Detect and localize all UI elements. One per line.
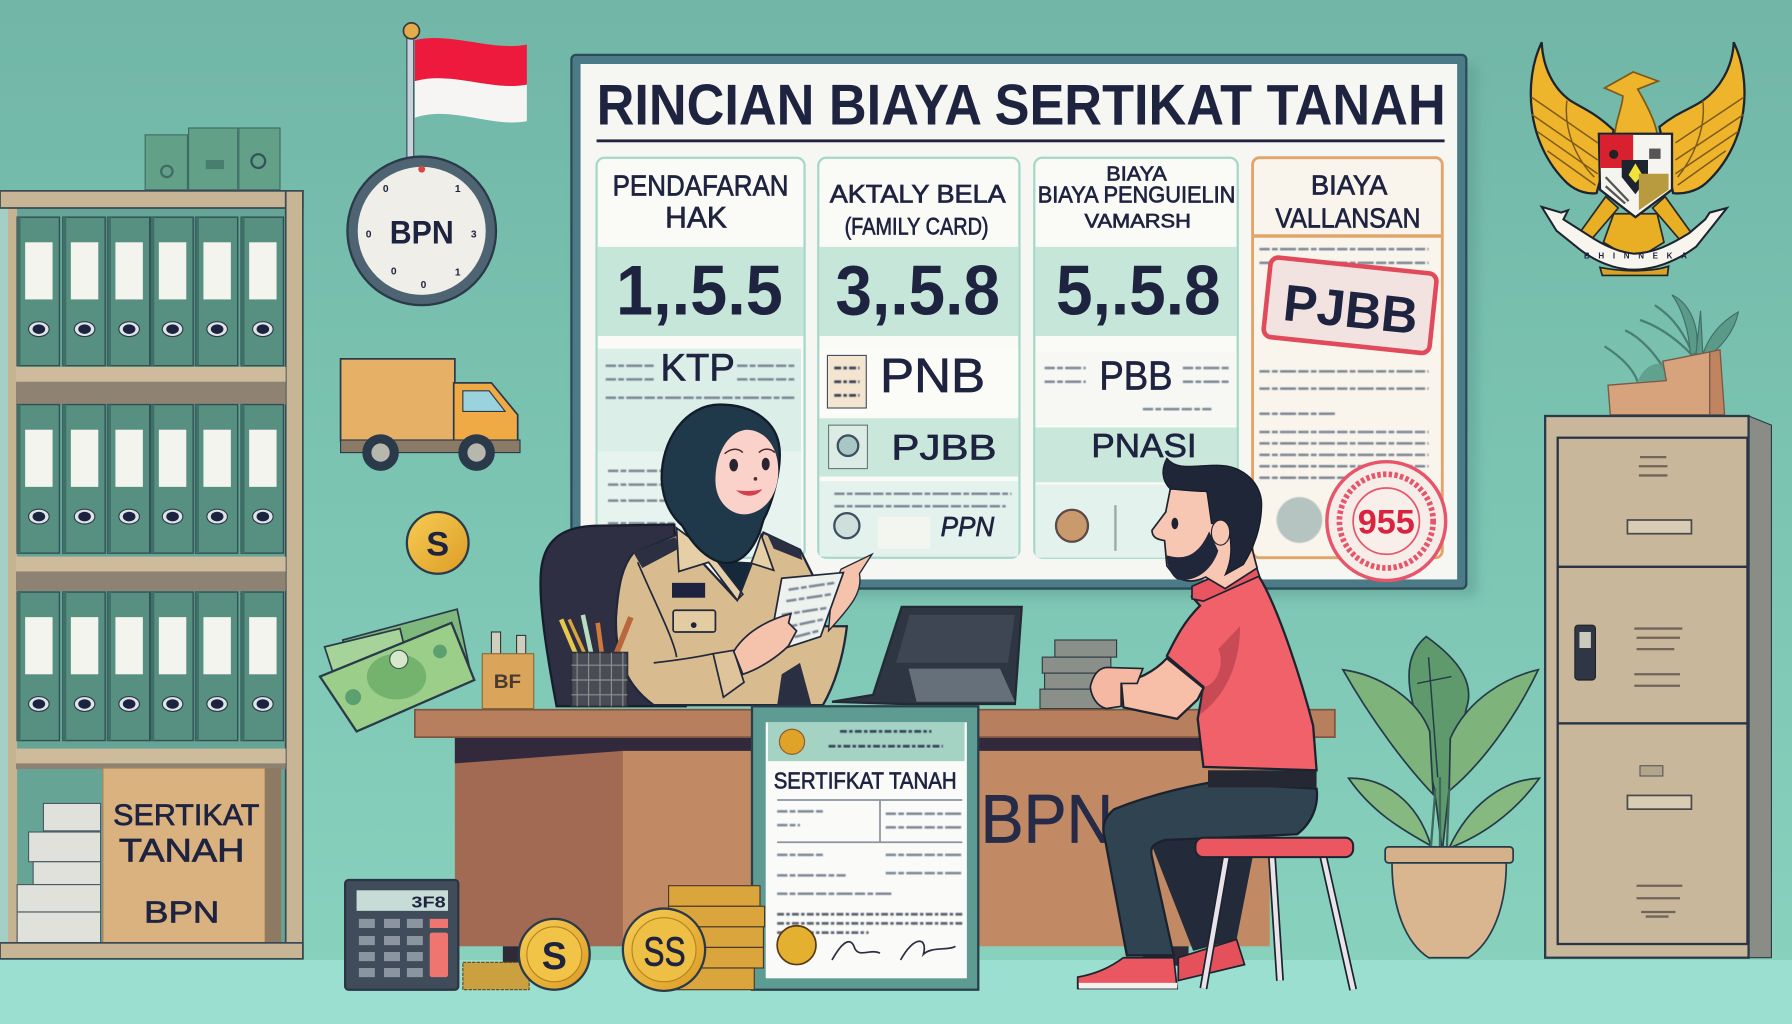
dollar coin: S (542, 935, 567, 978)
filing cabinet (1545, 416, 1771, 958)
ribbon: BHINNEKA (1584, 251, 1687, 260)
calculator (345, 880, 458, 990)
binders row 3 (17, 592, 283, 741)
column 3: biaya penguielin: BIAYA (1106, 163, 1167, 186)
shield (1599, 134, 1672, 217)
books on top of the shelf (145, 128, 280, 190)
book stack on desk (1040, 640, 1117, 709)
poster title: RINCIAN BIAYA SERTIKAT TANAH (597, 74, 1446, 138)
column 2: aktaly bela: AKTALY BELA (830, 180, 1006, 208)
wall clock (347, 157, 496, 305)
box: sertikat tanah bpn: TANAH (119, 833, 245, 869)
floor (0, 960, 1792, 1024)
shirt (1167, 568, 1317, 770)
dollar coin on wall: S (426, 525, 449, 563)
land certificate: SERTIFKAT TANAH (774, 768, 957, 794)
column 2: aktaly bela (818, 158, 1019, 558)
signatures (832, 941, 955, 960)
column 1: pendafaran hak: PENDAFARAN (613, 170, 789, 202)
wall clock: 1 (455, 267, 461, 278)
box: sertikat tanah bpn: BPN (144, 894, 219, 929)
front shoe (1078, 958, 1177, 989)
pencil cup (561, 615, 631, 706)
garuda emblem (1531, 42, 1745, 275)
right hand (734, 614, 797, 674)
column 3: biaya penguielin: PNASI (1091, 428, 1197, 465)
column 2: aktaly bela: PPN (941, 511, 994, 542)
column 3: biaya penguielin: VAMARSH (1085, 210, 1191, 232)
man in red shirt (1078, 458, 1353, 990)
binders row 1 (17, 217, 283, 366)
dollar coin on wall (407, 512, 469, 574)
stamp: pjbb: PJBB (1281, 273, 1421, 345)
hijab (662, 405, 780, 563)
coin pile (463, 962, 529, 990)
back shoe (1178, 939, 1245, 981)
column 1: pendafaran hak: HAK (665, 201, 727, 234)
column 2: aktaly bela: PNB (880, 350, 985, 403)
land certificate (752, 706, 978, 990)
column 3: biaya penguielin: PBB (1099, 353, 1173, 399)
round red stamp: 955 (1358, 504, 1415, 542)
uniform (616, 533, 847, 705)
box: sertikat tanah bpn (103, 768, 281, 943)
indonesian flag (403, 23, 527, 163)
arm (1121, 658, 1203, 719)
pencil holder labelled BF (482, 632, 534, 709)
column 2: aktaly bela: (FAMILY CARD) (845, 213, 989, 240)
left hand behind paper (829, 554, 872, 631)
monitor on desk (832, 607, 1022, 704)
paper stacks (17, 803, 101, 943)
delivery truck (341, 359, 520, 471)
trousers (1103, 783, 1317, 955)
column 3: biaya penguielin: 5,.5.8 (1056, 251, 1221, 330)
wall clock: 0 (366, 230, 372, 241)
wall clock: 3 (471, 230, 477, 241)
wall clock: BPN (390, 214, 454, 250)
calculator: 3F8 (411, 894, 446, 911)
column 4: biaya vallansan (1253, 158, 1442, 558)
right wing (1659, 42, 1745, 193)
ribbon (1542, 207, 1727, 275)
cuff (713, 650, 744, 697)
belt (1208, 770, 1317, 787)
desk chair (541, 525, 686, 706)
bookshelf with binders (0, 128, 303, 959)
box: sertikat tanah bpn: SERTIKAT (113, 799, 259, 832)
large coin: SS (643, 929, 686, 975)
head and body (1605, 72, 1658, 134)
wall clock: 1 (455, 184, 461, 195)
left wing (1531, 42, 1614, 193)
pencil holder labelled BF: BF (494, 671, 521, 693)
desk label: bpn: BPN (981, 780, 1113, 857)
poster: rincian biaya sertikat tanah (571, 55, 1478, 597)
officer in uniform (616, 405, 872, 705)
column 1: pendafaran hak: KTP (661, 347, 735, 389)
face (715, 430, 778, 514)
certificate seal (777, 926, 816, 965)
wall clock: 0 (421, 280, 427, 291)
document in hand (768, 573, 843, 654)
large coin (623, 909, 705, 991)
dollar coin (519, 919, 590, 990)
binders row 2 (17, 405, 283, 553)
small plant on cabinet (1605, 295, 1738, 415)
banknotes (320, 609, 474, 731)
column 1: pendafaran hak (597, 158, 805, 558)
hands (1090, 667, 1143, 709)
stool (1195, 838, 1353, 990)
column 4: biaya vallansan: BIAYA (1311, 169, 1388, 200)
column 1: pendafaran hak: 1,.5.5 (616, 251, 783, 330)
round red stamp (1327, 462, 1446, 581)
column 4: biaya vallansan: VALLANSAN (1275, 202, 1421, 233)
wall clock: 0 (383, 184, 389, 195)
column 3: biaya penguielin (1034, 158, 1238, 558)
legs and tail (1579, 197, 1691, 261)
stamp: pjbb (1263, 257, 1437, 354)
wall clock: 0 (391, 266, 397, 277)
column 2: aktaly bela: PJBB (891, 427, 997, 467)
head (1152, 486, 1257, 589)
back leg (1150, 834, 1257, 951)
column 2: aktaly bela: 3,.5.8 (835, 251, 1000, 330)
cabinet lock (1575, 625, 1595, 680)
coin stack (669, 886, 765, 990)
potted plant (1343, 637, 1539, 958)
desk (415, 710, 1335, 968)
column 3: biaya penguielin: BIAYA PENGUIELIN (1038, 181, 1235, 207)
